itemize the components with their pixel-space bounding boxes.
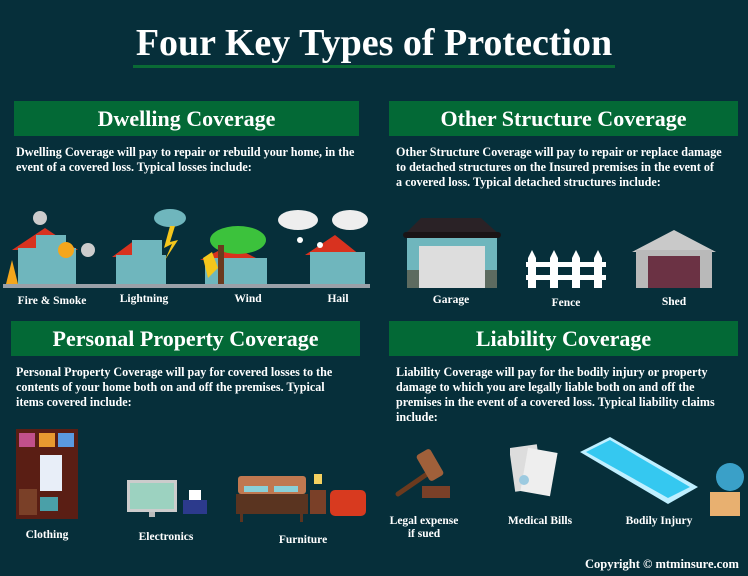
copyright: Copyright © mtminsure.com: [585, 557, 739, 571]
heading: liability: [389, 321, 738, 356]
panel: other structure coverage: Shed: [662, 296, 686, 308]
panel: dwelling coverage: Lightning: [120, 293, 168, 305]
panel: dwelling coverage: Wind: [234, 293, 262, 305]
heading: personal property: Personal Property Coverage: [53, 326, 318, 351]
heading: dwelling: [14, 101, 359, 136]
icons: houses with perils: [3, 209, 370, 288]
icon: fence: [526, 250, 606, 288]
text: other structure: to detached structures on the Insured premises in the event of: [396, 160, 714, 174]
panel: dwelling coverage: [3, 101, 370, 307]
panel: personal property coverage: [11, 321, 366, 546]
heading: other structure: Other Structure Coverage: [440, 106, 686, 131]
text: other structure: [396, 145, 722, 189]
text: personal property: contents of your home both on and off the premises. Typical: [16, 380, 325, 394]
text: liability: Liability Coverage will pay for the bodily injury or property: [396, 365, 708, 379]
text: liability: [396, 365, 715, 424]
panel: personal property coverage: Electronics: [139, 531, 193, 543]
text: other structure: Other Structure Coverage will pay to repair or replace damage: [396, 145, 722, 159]
text: liability: include:: [396, 410, 438, 424]
labels: personal property: Clothing: [26, 529, 68, 541]
text: liability: premises in the event of a covered loss. Typical liability claims: [396, 395, 715, 409]
icon: furniture: [236, 474, 366, 522]
icon: gavel: [396, 449, 450, 498]
icon: wardrobe: [16, 429, 78, 519]
panel: liability coverage: [389, 321, 744, 540]
labels: dwelling: Fire & Smoke: [18, 295, 86, 307]
icon: medical bills: [510, 444, 558, 496]
icon: shed: [632, 230, 716, 288]
text: dwelling: Dwelling Coverage will pay to repair or rebuild your home, in the: [16, 145, 354, 159]
panel: other structure coverage: Fence: [552, 297, 580, 309]
icon: electronics: [127, 480, 207, 517]
icon: pool: [580, 437, 744, 516]
text: dwelling: event of a covered loss. Typical losses include:: [16, 160, 252, 174]
text: other structure: a covered loss. Typical detached structures include:: [396, 175, 661, 189]
panel: liability coverage: Medical Bills: [508, 515, 572, 527]
labels: liability: [390, 515, 458, 540]
heading: dwelling: Dwelling Coverage: [98, 106, 275, 131]
panel: dwelling coverage: Hail: [327, 293, 349, 305]
panel: liability coverage: Bodily Injury: [626, 515, 692, 527]
text: personal property: [16, 365, 332, 409]
heading: liability: Liability Coverage: [476, 326, 651, 351]
heading: personal property: [11, 321, 360, 356]
panel: personal property coverage: Furniture: [279, 534, 327, 546]
text: personal property: Personal Property Coverage will pay for covered losses to the: [16, 365, 332, 379]
title: Four Key Types of Protection: [136, 22, 612, 64]
text: liability: damage to which you are legally liable both on and off the: [396, 380, 695, 394]
panel: other structure coverage: [389, 101, 738, 309]
labels: other structure: Garage: [433, 294, 469, 306]
labels: liability: if sued: [408, 528, 440, 540]
labels: liability: Legal expense: [390, 515, 458, 527]
text: dwelling: [16, 145, 354, 174]
text: personal property: items covered include:: [16, 395, 132, 409]
icon: garage: [403, 218, 501, 288]
heading: other structure: [389, 101, 738, 136]
